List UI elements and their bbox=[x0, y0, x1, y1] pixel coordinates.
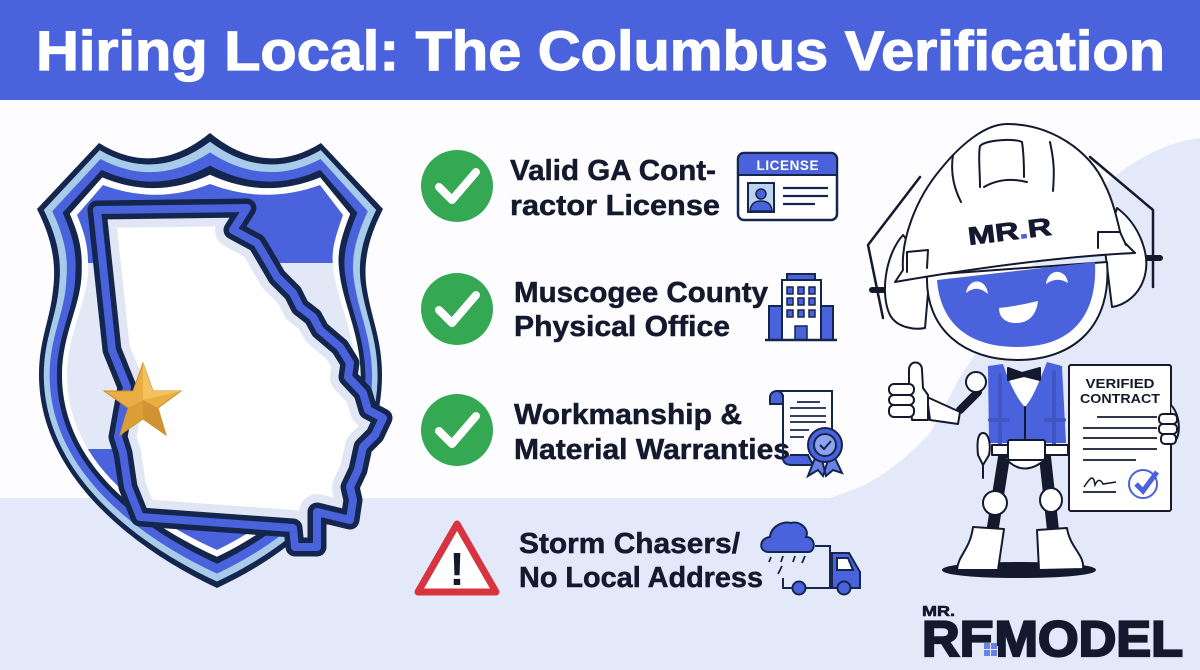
label: storm chasers: No Local Address bbox=[519, 562, 763, 594]
blue face bbox=[937, 262, 1095, 347]
gold star marker bbox=[104, 363, 181, 435]
earmuffs bbox=[885, 208, 1146, 329]
item: physical office bbox=[421, 273, 837, 345]
icon: office building bbox=[765, 274, 837, 340]
icon: storm cloud and truck bbox=[761, 522, 860, 594]
item: valid license bbox=[421, 150, 837, 222]
label: storm chasers: Storm Chasers/ bbox=[519, 528, 740, 560]
verified contract bbox=[1069, 365, 1179, 511]
Mr. Remodel logo: REMODEL bbox=[922, 611, 1183, 667]
ear straps bbox=[868, 157, 1153, 318]
hat logo: MR .R bbox=[966, 213, 1053, 251]
robot body bbox=[943, 362, 1095, 577]
verified contract: CONTRACT bbox=[1080, 392, 1160, 406]
label: license: Valid GA Cont- bbox=[510, 155, 716, 187]
Georgia state map bbox=[97, 208, 383, 547]
label: office: Physical Office bbox=[514, 311, 730, 343]
icon: green check bbox=[421, 273, 493, 345]
icon: warning triangle: ! bbox=[449, 543, 465, 595]
shield with Georgia map bbox=[37, 133, 383, 588]
label: license: ractor License bbox=[510, 190, 720, 222]
label: warranties: Workmanship & bbox=[514, 399, 742, 431]
title banner: Hiring Local: The Columbus Verification bbox=[36, 19, 1165, 82]
icon: green check bbox=[421, 394, 493, 466]
mascot robot bbox=[868, 124, 1160, 577]
head bbox=[927, 262, 1107, 360]
icon: warning triangle bbox=[418, 524, 496, 595]
thumbs up arm bbox=[889, 362, 986, 424]
verified contract: VERIFIED bbox=[1086, 377, 1154, 391]
icon: warranty scroll with seal bbox=[770, 391, 842, 476]
label: office: Muscogee County bbox=[514, 277, 768, 309]
icon: license card: LICENSE bbox=[756, 158, 818, 173]
item: storm chasers warning bbox=[418, 522, 860, 595]
icon: license card bbox=[738, 153, 837, 220]
hard hat bbox=[895, 124, 1135, 282]
icon: green check bbox=[421, 150, 493, 222]
title banner bbox=[0, 0, 1200, 100]
item: warranties bbox=[421, 391, 842, 476]
label: warranties: Material Warranties bbox=[514, 434, 790, 466]
Mr. Remodel logo: MR. bbox=[922, 603, 955, 620]
